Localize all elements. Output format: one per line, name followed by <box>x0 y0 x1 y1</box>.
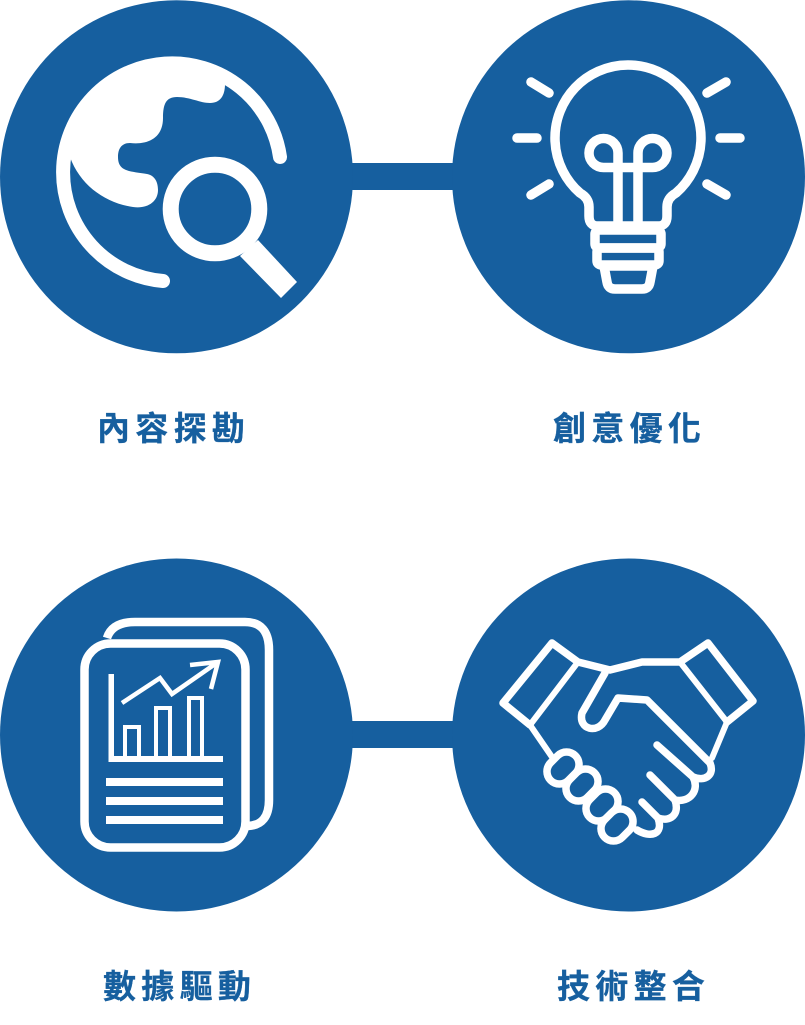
circle background <box>0 558 353 912</box>
icon: globe with magnifier <box>63 62 297 298</box>
label: content exploration: 內容探勘 <box>97 410 250 447</box>
panel: creative optimization <box>452 0 805 353</box>
connector: bottom row <box>345 721 460 748</box>
label: creative optimization: 創意優化 <box>553 410 706 447</box>
label: data driven: 數據驅動 <box>103 968 256 1005</box>
circle background <box>452 0 805 353</box>
connector: top row <box>345 163 460 190</box>
panel: technology integration <box>452 558 805 912</box>
icon: handshake <box>503 643 753 846</box>
panel: content exploration <box>0 0 353 353</box>
circle background <box>452 558 805 912</box>
icon: light bulb <box>517 65 740 289</box>
panel: data driven <box>0 558 353 912</box>
circle background <box>0 0 353 353</box>
label: technology integration: 技術整合 <box>557 968 710 1005</box>
icon: report with chart <box>84 622 269 848</box>
